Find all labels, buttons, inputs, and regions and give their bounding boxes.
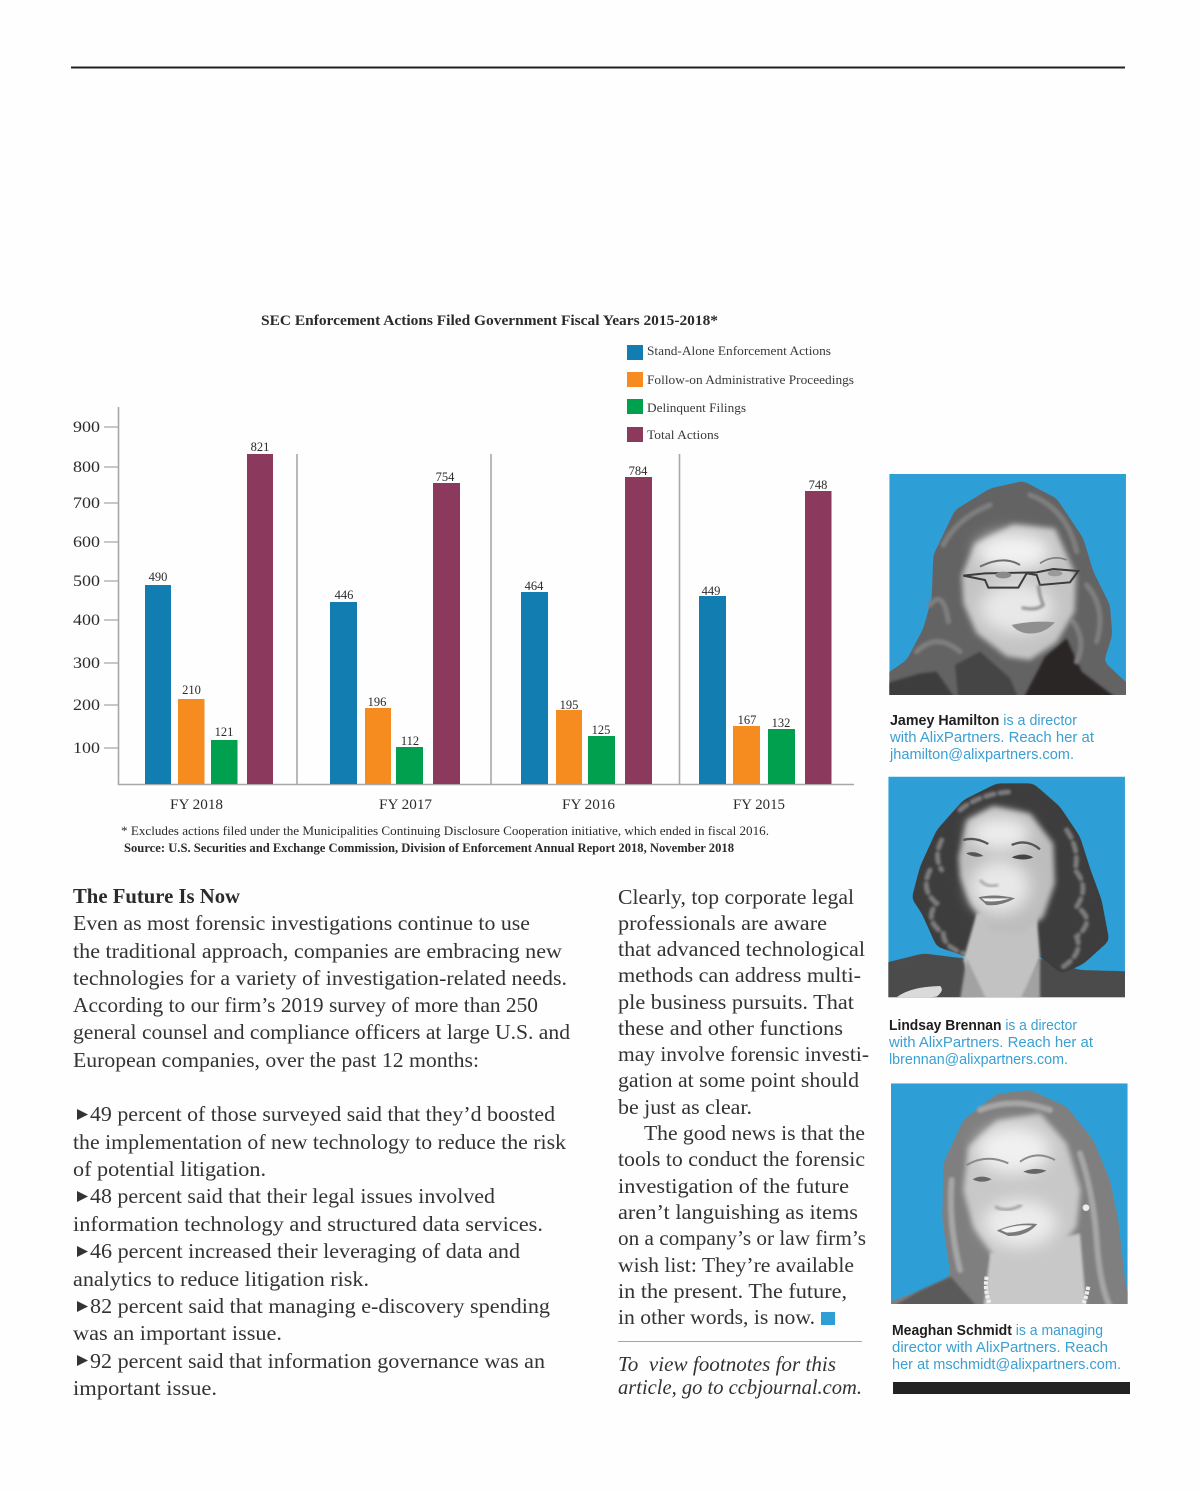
bars: FY 2016: 784 (629, 464, 648, 478)
legend: Stand-Alone Enforcement Actions (647, 344, 831, 358)
body text: right column: The good news is that the (644, 1121, 865, 1145)
bulleted list of survey findings: 49 percent of those surveyed said that they’d boosted (90, 1102, 555, 1126)
y axis with ticks: 300 (73, 655, 100, 672)
body text: intro paragraph (73, 911, 570, 1072)
y axis with ticks: 800 (73, 459, 100, 476)
caption: Lindsay Brennan: Lindsay Brennan is a director (889, 1018, 1077, 1034)
y axis with ticks: 700 (73, 495, 100, 512)
bars: FY 2016: 464 (525, 579, 544, 593)
photo: Meaghan Schmidt (883, 1083, 1133, 1313)
body text: intro paragraph: the traditional approach, companies are embracing new (73, 939, 563, 963)
caption line 2: with AlixPartners. Reach her at (889, 730, 1094, 746)
y axis with ticks: 900 (73, 419, 100, 436)
bars: FY 2015: 748 (809, 478, 827, 492)
bars: FY 2015 (699, 478, 832, 813)
photo: Lindsay Brennan (888, 776, 1125, 998)
note: footnotes pointer (618, 1352, 862, 1399)
body text: intro paragraph: technologies for a variety of investigation-related needs. (73, 966, 567, 990)
bulleted list of survey findings: the implementation of new technology to reduce the risk (73, 1130, 566, 1154)
body text: right column: investigation of the future (618, 1174, 849, 1198)
body text: right column: tools to conduct the forensic (618, 1147, 865, 1171)
body text: right column (618, 885, 869, 1329)
bulleted list of survey findings: was an important issue. (73, 1321, 282, 1345)
body text: right column: wish list: They’re available (618, 1253, 854, 1277)
body text: intro paragraph: According to our firm’s 2019 survey of more than 250 (73, 993, 538, 1017)
bulleted list of survey findings: 82 percent said that managing e-discovery spending (90, 1294, 550, 1318)
bars: FY 2018: 121 (215, 725, 233, 739)
bars: FY 2018 (145, 440, 273, 813)
body text: intro paragraph: general counsel and compliance officers at large U.S. and (73, 1020, 570, 1044)
body text: right column: these and other functions (618, 1016, 843, 1040)
chart footnote: * Excludes actions filed under the Municipalities Continuing Disclosure Cooperation initiative, which ended in fiscal 2016. (121, 824, 769, 838)
bars: FY 2018: 490 (149, 570, 167, 584)
caption line 2: director with AlixPartners. Reach (892, 1340, 1108, 1356)
bars: FY 2017: 196 (368, 695, 386, 709)
bars: FY 2015: 132 (772, 716, 790, 730)
body text: right column: on a company’s or law firm’s (618, 1226, 866, 1250)
black closing bar (893, 1382, 1130, 1394)
body text: right column: in other words, is now. (618, 1305, 815, 1329)
bulleted list of survey findings: 48 percent said that their legal issues involved (90, 1184, 495, 1208)
bars: FY 2016 (521, 464, 652, 813)
caption line 3: her at mschmidt@alixpartners.com. (892, 1357, 1121, 1373)
caption: Jamey Hamilton: Jamey Hamilton is a director (890, 713, 1077, 729)
body text: right column: Clearly, top corporate legal (618, 885, 854, 909)
caption line 3: lbrennan@alixpartners.com. (889, 1052, 1068, 1068)
legend: Total Actions (647, 428, 719, 442)
chart source: Source: U.S. Securities and Exchange Commission, Division of Enforcement Annual Report 2018, November 2018 (124, 841, 734, 855)
note: footnotes pointer: article, go to ccbjournal.com. (618, 1375, 862, 1399)
chart: SEC enforcement actions (73, 313, 854, 855)
note: footnotes pointer: To view footnotes for this (618, 1352, 836, 1376)
bars: FY 2017: 112 (401, 734, 419, 748)
chart title: SEC Enforcement Actions Filed Government Fiscal Years 2015-2018* (261, 313, 718, 329)
body text: right column: aren’t languishing as items (618, 1200, 858, 1224)
legend (627, 344, 854, 442)
body text: right column: that advanced technological (618, 937, 865, 961)
y axis with ticks (73, 407, 854, 784)
bars: FY 2016: 195 (560, 698, 578, 712)
bars: FY 2017: 446 (335, 588, 353, 602)
body text: right column: be just as clear. (618, 1095, 752, 1119)
legend: Follow-on Administrative Proceedings (647, 373, 854, 387)
bars: FY 2018: FY 2018 (170, 797, 223, 813)
body text: right column: in the present. The future, (618, 1279, 847, 1303)
bulleted list of survey findings: analytics to reduce litigation risk. (73, 1267, 369, 1291)
y axis with ticks: 200 (73, 697, 100, 714)
legend: Delinquent Filings (647, 401, 746, 415)
bulleted list of survey findings (73, 1102, 566, 1400)
body text: right column: ple business pursuits. That (618, 990, 854, 1014)
bars: FY 2016: 125 (592, 723, 610, 737)
bars: FY 2017 (330, 470, 460, 813)
icon: end-of-article square (821, 1312, 835, 1325)
bars: FY 2017: FY 2017 (379, 797, 432, 813)
bars: FY 2018: 210 (182, 683, 201, 697)
photo: Jamey Hamilton (889, 474, 1126, 695)
body text: intro paragraph: Even as most forensic investigations continue to use (73, 911, 530, 935)
caption line 2: with AlixPartners. Reach her at (888, 1035, 1093, 1051)
bulleted list of survey findings: of potential litigation. (73, 1157, 266, 1181)
bars: FY 2016: FY 2016 (562, 797, 615, 813)
bars: FY 2015: FY 2015 (733, 797, 785, 813)
bars: FY 2015: 449 (702, 584, 720, 598)
bars: FY 2018: 821 (251, 440, 269, 454)
bulleted list of survey findings: information technology and structured data services. (73, 1212, 543, 1236)
caption: Meaghan Schmidt: Meaghan Schmidt is a managing (892, 1323, 1103, 1339)
bars: FY 2015: 167 (738, 713, 756, 727)
y axis with ticks: 400 (73, 612, 100, 629)
bulleted list of survey findings: 92 percent said that information governance was an (90, 1349, 545, 1373)
body text: right column: professionals are aware (618, 911, 827, 935)
body text: right column: methods can address multi- (618, 963, 861, 987)
heading: The Future Is Now: The Future Is Now (73, 884, 241, 908)
bulleted list of survey findings: 46 percent increased their leveraging of data and (90, 1239, 520, 1263)
body text: right column: may involve forensic investi- (618, 1042, 869, 1066)
top rule (71, 66, 1125, 68)
y axis with ticks: 500 (73, 573, 100, 590)
y axis with ticks: 100 (73, 740, 100, 757)
bars: FY 2017: 754 (436, 470, 455, 484)
body text: right column: gation at some point should (618, 1068, 859, 1092)
body text: intro paragraph: European companies, over the past 12 months: (73, 1048, 479, 1072)
caption line 3: jhamilton@alixpartners.com. (889, 747, 1074, 763)
y axis with ticks: 600 (73, 534, 100, 551)
bulleted list of survey findings: important issue. (73, 1376, 217, 1400)
